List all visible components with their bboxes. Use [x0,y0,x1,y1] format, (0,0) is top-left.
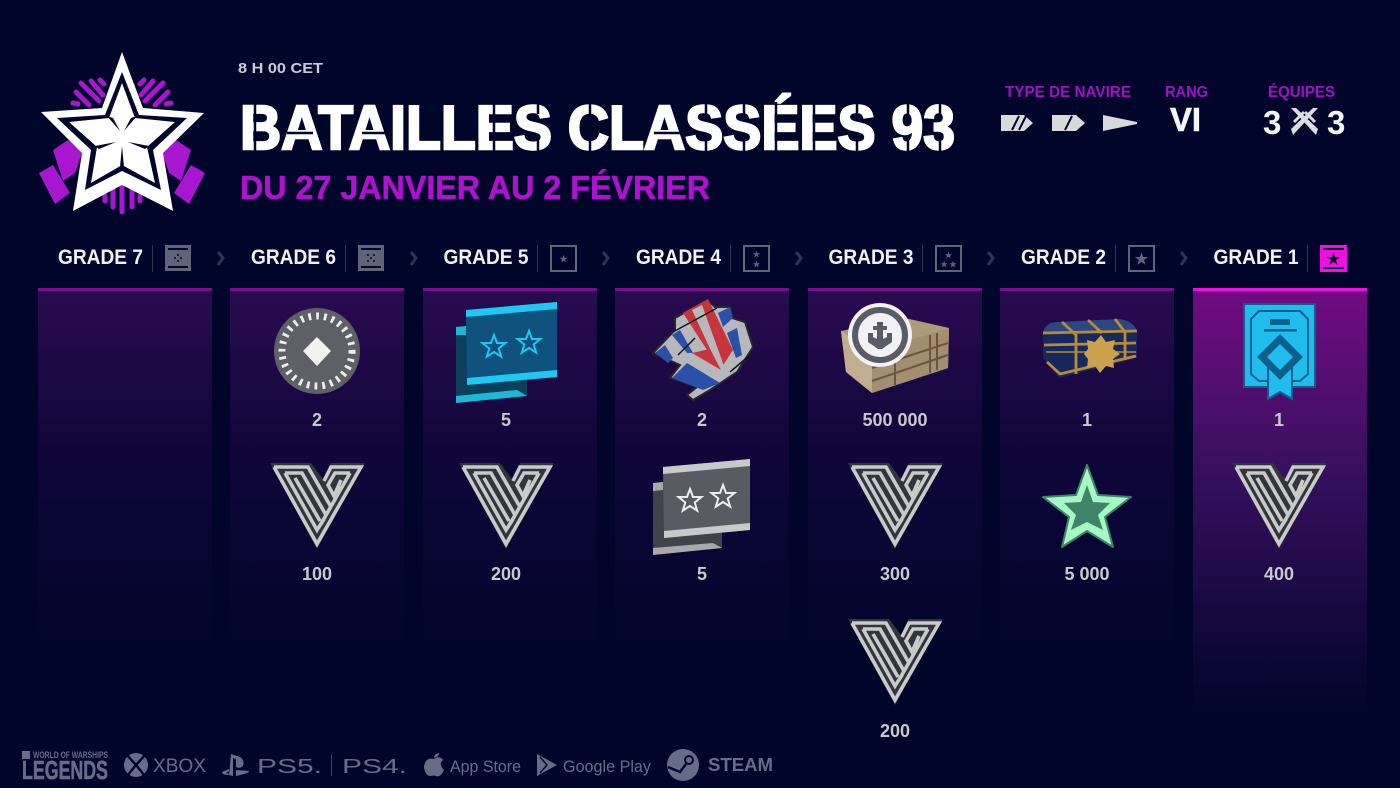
icon: V tokens [848,463,943,549]
reward amount: 1 [1274,410,1284,430]
icon: ship type battleship [1103,115,1137,131]
header: grade 4 [636,245,801,272]
header: grade 2: GRADE 2 [1021,245,1106,269]
icon: V tokens [848,619,943,705]
tier block [1165,84,1208,138]
panel: grade 6 [230,288,404,658]
reward amount: 400 [1264,564,1294,584]
header: grade 7: GRADE 7 [58,245,143,269]
header: grade 1 [1214,245,1347,272]
icon: ship type cruiser [1052,115,1085,131]
logo: PlayStation 5 and 4 [222,754,407,778]
panel: grade 5 [423,288,597,658]
icon: green star [1043,465,1131,547]
reward amount: 2 [312,410,322,430]
header: grade 5 [444,245,608,272]
header: grade 1: ★ [1327,251,1341,268]
logo: Steam: STEAM [708,755,773,775]
logo: World of Warships Legends: LEGENDS [22,755,108,785]
icon: treasure chest [1043,319,1137,378]
logo: Google Play [537,754,651,776]
grade headers [58,245,1347,272]
header: grade 1: GRADE 1 [1214,245,1299,269]
reward amount: 2 [697,410,707,430]
icon: V tokens [1232,463,1327,549]
icon: ship type destroyer [1001,115,1033,131]
header: grade 4: ★ [753,260,761,269]
reward amount: 200 [491,564,521,584]
logo: Google Play: Google Play [563,757,651,776]
header: grade 7 [58,245,223,272]
reward amount: 5 [697,564,707,584]
reward amount: 100 [302,564,332,584]
logo: PlayStation 5 and 4: PS5. [257,756,322,778]
header: grade 5: ★ [559,254,568,264]
reward amount: 300 [880,564,910,584]
logo: Xbox: XBOX [153,756,206,777]
header: grade 4: ★ [753,250,761,259]
header: grade 3: ★★ [940,260,957,269]
header: grade 2 [1021,245,1186,272]
icon: credits crate [841,303,949,393]
header: grade 3: GRADE 3 [828,245,914,269]
icon: grey flags [653,459,750,555]
icon: V tokens [459,463,554,549]
panel: grade 7 [38,288,212,658]
panel: grade 4 [615,288,789,658]
reward amount: 500 000 [862,410,928,430]
logo: World of Warships Legends: WORLD OF WARSHIPS [33,750,108,760]
dates subtitle: DU 27 JANVIER AU 2 FÉVRIER [240,169,710,206]
teams block: 3 [1263,104,1281,141]
teams block [1263,82,1345,141]
header: grade 3: ★ [945,251,953,260]
logo: ranked star emblem [39,52,205,212]
header: grade 4: GRADE 4 [636,245,721,269]
header: grade 3 [828,245,993,272]
header: grade 2: ★ [1135,251,1149,268]
teams block: 3 [1327,104,1345,141]
teams block: ÉQUIPES [1268,82,1335,101]
logo: App Store [424,753,521,776]
time label: 8 H 00 CET [238,60,323,77]
header: grade 5: GRADE 5 [444,245,529,269]
reward amount: 200 [880,721,910,741]
logo: Xbox [124,753,206,777]
icon: signal coin [274,308,360,394]
logo: App Store: App Store [450,757,521,776]
reward amount: 5 [501,410,511,430]
tier block: RANG [1165,84,1208,101]
header: grade 6: GRADE 6 [251,245,336,269]
logo: Steam [667,749,773,781]
icon: certificate [1244,304,1315,399]
ship type block: TYPE DE NAVIRE [1005,84,1131,101]
icon: blue flags [456,302,557,403]
panel: grade 2 [1000,288,1174,658]
panel: grade 1 (highlighted) [1193,288,1367,720]
platform logos [22,749,773,785]
icon: V tokens [270,463,365,549]
icon: tricolour camouflage insignia [653,299,753,400]
tier block: VI [1170,101,1201,138]
logo: World of Warships Legends [22,750,108,785]
panel: grade 3 [808,288,982,741]
logo: PlayStation 5 and 4: PS4. [342,756,407,778]
reward amount: 1 [1082,410,1092,430]
reward amount: 5 000 [1064,564,1110,584]
title: BATAILLES CLASSÉES 93 [240,94,955,163]
ship type block [1001,84,1137,131]
icon: crossed swords [1291,108,1318,135]
header: grade 6 [251,245,416,272]
